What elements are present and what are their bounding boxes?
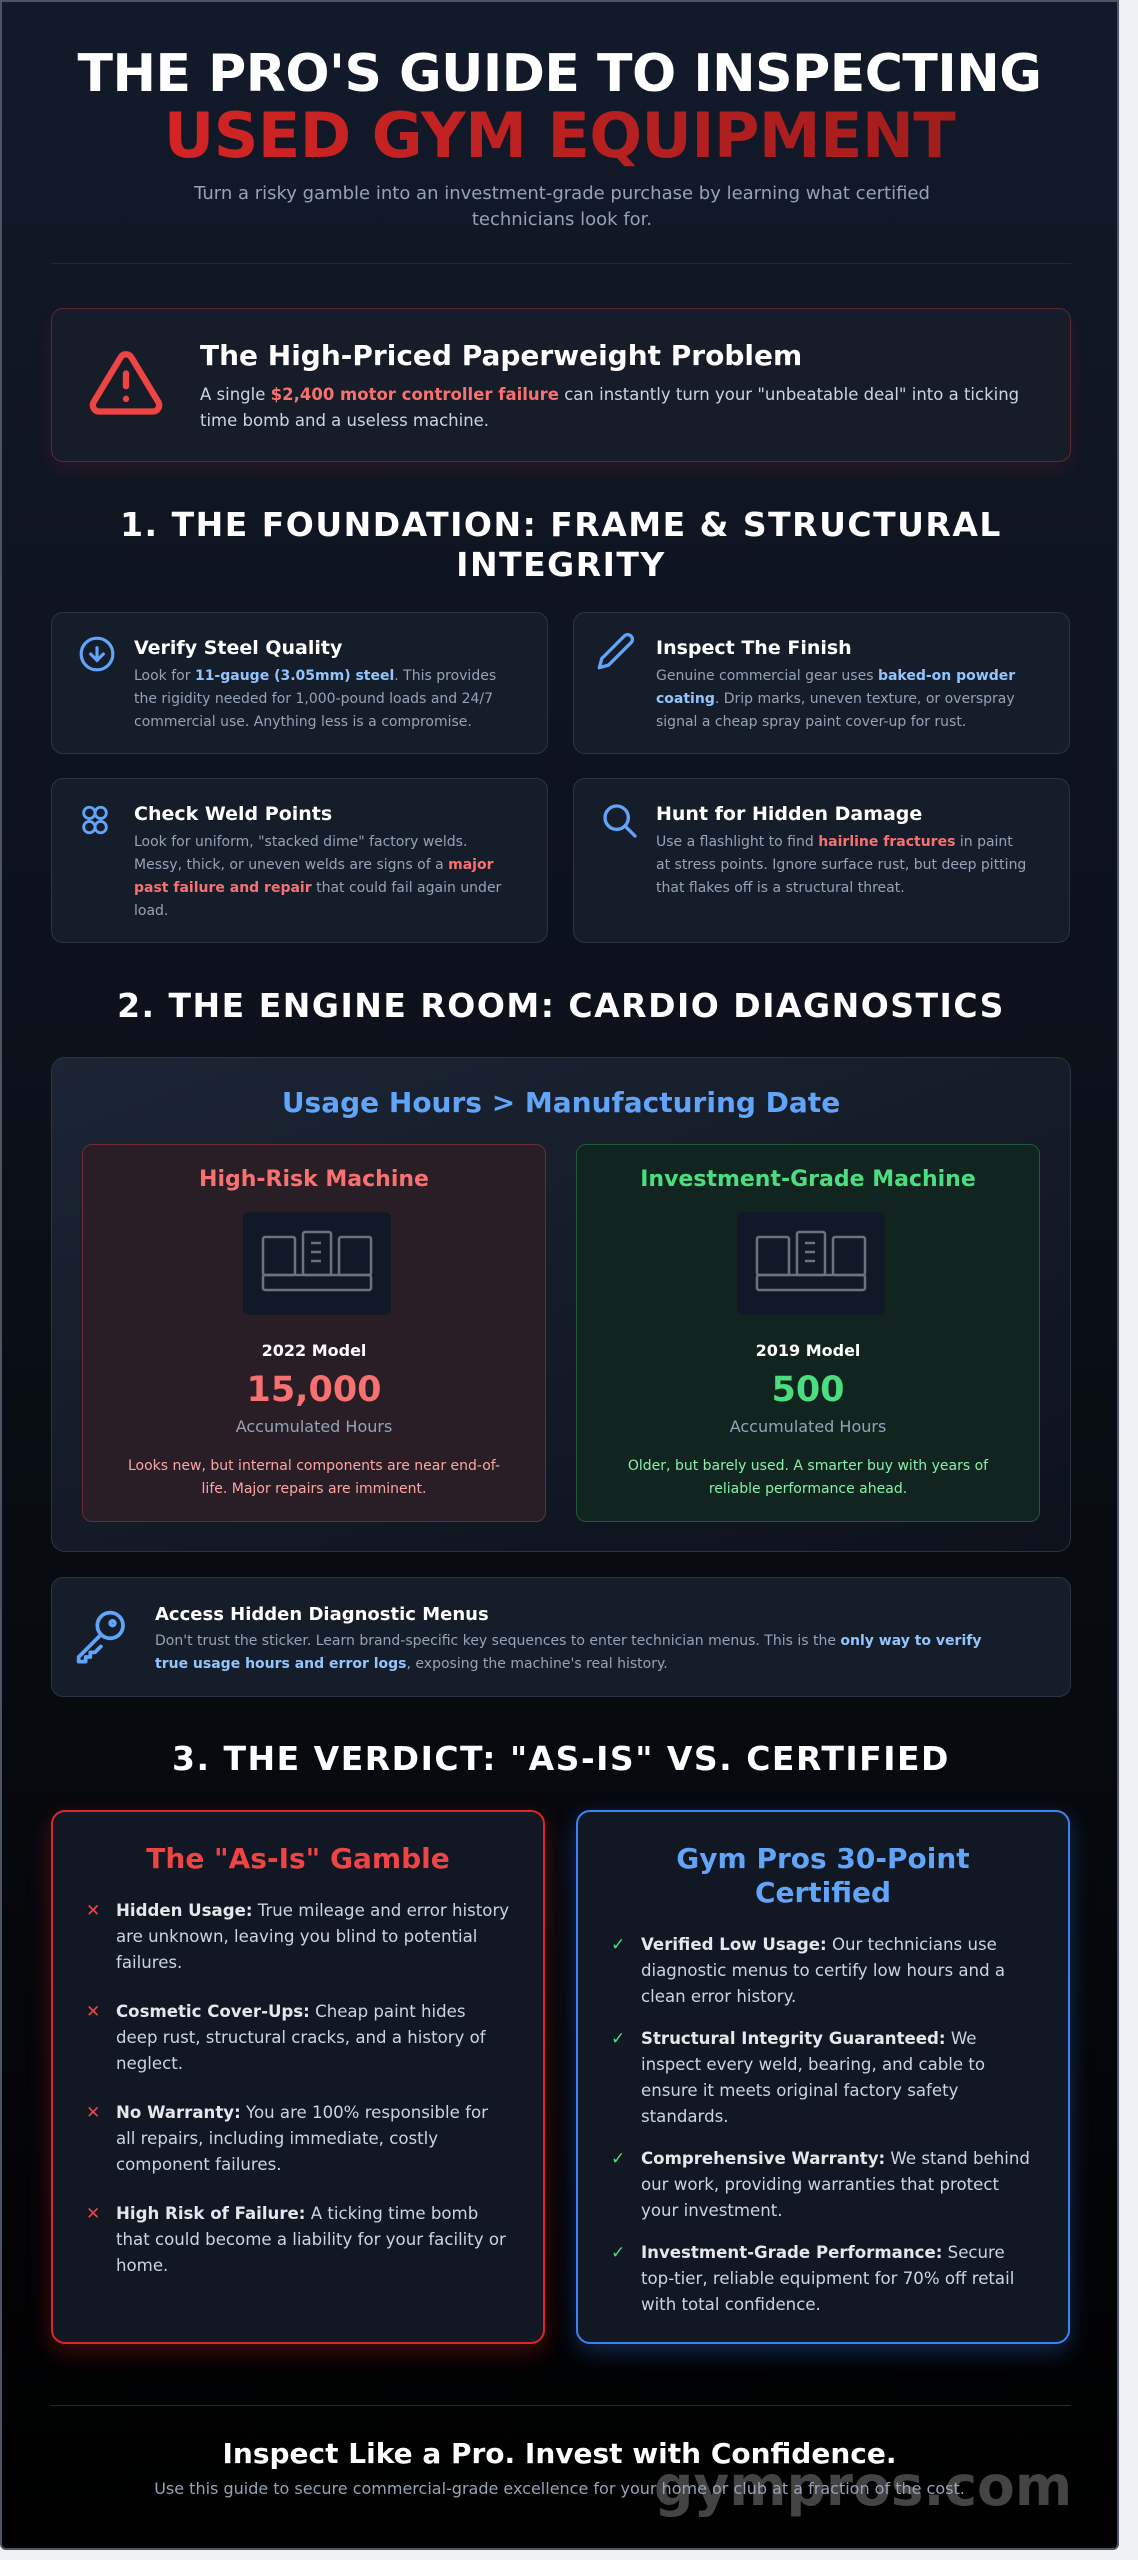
title: USED GYM EQUIPMENT bbox=[164, 99, 955, 172]
section 3 heading: 3. THE VERDICT: "AS-IS" VS. CERTIFIED bbox=[172, 1739, 950, 1778]
panel: as-is gamble: High Risk of Failure: A ticking time bomb that could become a liability for your facility or home. bbox=[116, 2204, 506, 2275]
footer: Inspect Like a Pro. Invest with Confidence. bbox=[222, 2437, 896, 2470]
problem callout: A single $2,400 motor controller failure can instantly turn your "unbeatable deal" into a ticking time bomb and a useless machine. bbox=[200, 385, 1019, 430]
card: damage: Use a flashlight to find hairline fractures in paint at stress points. Ignore surface rust, but deep pitting that flakes off is a structural threat. bbox=[656, 834, 1026, 896]
title: THE PRO'S GUIDE TO INSPECTING bbox=[78, 44, 1041, 104]
high-risk machine: 15,000 bbox=[246, 1370, 382, 1410]
card: finish: Genuine commercial gear uses baked-on powder coating. Drip marks, uneven texture, or overspray signal a cheap spray paint cover-up for rust. bbox=[656, 668, 1015, 730]
card: welds: Check Weld Points bbox=[134, 803, 332, 825]
title bbox=[78, 44, 1041, 172]
panel: as-is gamble: Hidden Usage: True mileage and error history are unknown, leaving you blind to potential failures. bbox=[116, 1901, 509, 1972]
card: welds bbox=[51, 778, 548, 943]
problem callout bbox=[51, 308, 1071, 462]
panel: usage hours bbox=[51, 1057, 1071, 1552]
panel: as-is gamble: Cosmetic Cover-Ups: Cheap paint hides deep rust, structural cracks, and a history of neglect. bbox=[116, 2002, 486, 2073]
callout: diagnostic menus bbox=[51, 1577, 1071, 1697]
panel: certified: ✓ bbox=[611, 2029, 625, 2049]
investment-grade machine: 2019 Model bbox=[756, 1341, 860, 1360]
panel: as-is gamble: ✕ bbox=[86, 2204, 100, 2224]
card: finish bbox=[573, 612, 1070, 754]
panel: as-is gamble: No Warranty: You are 100% responsible for all repairs, including immediate, costly component failures. bbox=[116, 2103, 488, 2174]
panel: certified: Verified Low Usage: Our technicians use diagnostic menus to certify low hours and a clean error history. bbox=[641, 1935, 1005, 2006]
card: steel: Verify Steel Quality bbox=[134, 637, 342, 659]
high-risk machine: Looks new, but internal components are near end-of-life. Major repairs are imminent. bbox=[128, 1458, 500, 1497]
panel: certified: ✓ bbox=[611, 1935, 625, 1955]
footer: Use this guide to secure commercial-grade excellence for your home or club at a fraction of the cost. bbox=[154, 2479, 965, 2498]
subtitle: Turn a risky gamble into an investment-grade purchase by learning what certified technicians look for. bbox=[194, 183, 930, 230]
callout: diagnostic menus: Don't trust the sticker. Learn brand-specific key sequences to enter technician menus. This is the only way to verify true usage hours and error logs, exposing the machine's real history. bbox=[155, 1633, 981, 1672]
panel: certified: Certified bbox=[755, 1876, 891, 1909]
section 1 heading: 1. THE FOUNDATION: FRAME & STRUCTURAL INTEGRITY bbox=[120, 505, 1002, 584]
investment-grade machine bbox=[576, 1144, 1040, 1522]
panel: certified: Comprehensive Warranty: We stand behind our work, providing warranties that protect your investment. bbox=[641, 2149, 1030, 2220]
card: finish: Inspect The Finish bbox=[656, 637, 852, 659]
high-risk machine: Accumulated Hours bbox=[236, 1417, 392, 1436]
panel: as-is gamble: ✕ bbox=[86, 1901, 100, 1921]
panel: certified: ✓ bbox=[611, 2243, 625, 2263]
card: steel bbox=[51, 612, 548, 754]
investment-grade machine: 500 bbox=[771, 1370, 845, 1410]
panel: as-is gamble: ✕ bbox=[86, 2002, 100, 2022]
panel: certified: ✓ bbox=[611, 2149, 625, 2169]
panel: usage hours: Usage Hours > Manufacturing Date bbox=[282, 1086, 840, 1119]
panel: as-is gamble bbox=[51, 1810, 545, 2344]
panel: as-is gamble: ✕ bbox=[86, 2103, 100, 2123]
panel: certified bbox=[576, 1810, 1070, 2344]
card: damage bbox=[573, 778, 1070, 943]
panel: certified: Investment-Grade Performance: Secure top-tier, reliable equipment for 70% off retail with total confidence. bbox=[641, 2243, 1014, 2314]
investment-grade machine: Accumulated Hours bbox=[730, 1417, 886, 1436]
problem callout: The High-Priced Paperweight Problem bbox=[200, 339, 802, 372]
footer bbox=[154, 2437, 965, 2498]
panel: certified: Gym Pros 30-Point bbox=[676, 1842, 970, 1875]
icon: warning bbox=[90, 351, 162, 415]
callout: diagnostic menus: Access Hidden Diagnostic Menus bbox=[155, 1604, 489, 1625]
card: steel: Look for 11-gauge (3.05mm) steel. This provides the rigidity needed for 1,000-pound loads and 24/7 commercial use. Anything less is a compromise. bbox=[134, 668, 496, 730]
card: welds: Look for uniform, "stacked dime" factory welds. Messy, thick, or uneven welds are signs of a major past failure and repair that could fail again under load. bbox=[134, 834, 501, 919]
section 2 heading: 2. THE ENGINE ROOM: CARDIO DIAGNOSTICS bbox=[117, 986, 1005, 1025]
investment-grade machine: Investment-Grade Machine bbox=[640, 1167, 976, 1192]
watermark: gympros.com bbox=[654, 2454, 1072, 2518]
card: damage: Hunt for Hidden Damage bbox=[656, 803, 922, 825]
panel: certified: Structural Integrity Guaranteed: We inspect every weld, bearing, and cable to ensure it meets original factory safety standards. bbox=[641, 2029, 985, 2126]
high-risk machine bbox=[82, 1144, 546, 1522]
high-risk machine: High-Risk Machine bbox=[199, 1167, 429, 1192]
investment-grade machine: Older, but barely used. A smarter buy with years of reliable performance ahead. bbox=[628, 1458, 988, 1497]
panel: as-is gamble: The "As-Is" Gamble bbox=[146, 1842, 450, 1875]
high-risk machine: 2022 Model bbox=[262, 1341, 366, 1360]
